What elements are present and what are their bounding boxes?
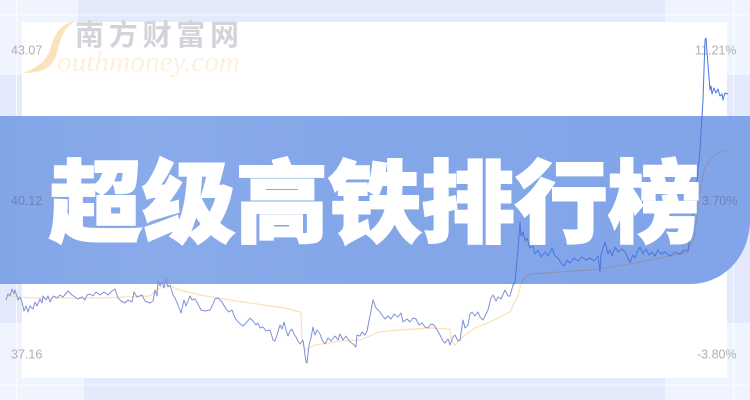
price line lower: [6, 278, 513, 363]
average line over band: [521, 150, 728, 284]
logo swoosh S: [23, 21, 76, 73]
price line upper: [513, 38, 728, 285]
watermark Chinese name: 南方财富网: [75, 19, 239, 52]
stock chart lines: [6, 38, 728, 363]
right axis max: 11.21%: [695, 44, 736, 58]
right axis mid: 3.70%: [702, 194, 737, 208]
watermark: southmoney logo: [23, 19, 240, 78]
watermark domain: outhmoney.com: [57, 46, 240, 78]
title band: [0, 116, 750, 284]
right axis min: -3.80%: [697, 348, 737, 362]
axis labels top: [11, 44, 737, 362]
left axis max: 43.07: [11, 44, 42, 58]
axis labels mid: [11, 194, 737, 208]
title: 超级高铁排行榜: [49, 155, 701, 255]
left axis min: 37.16: [11, 348, 42, 362]
left axis mid: 40.12: [11, 194, 42, 208]
average line: [7, 284, 521, 350]
